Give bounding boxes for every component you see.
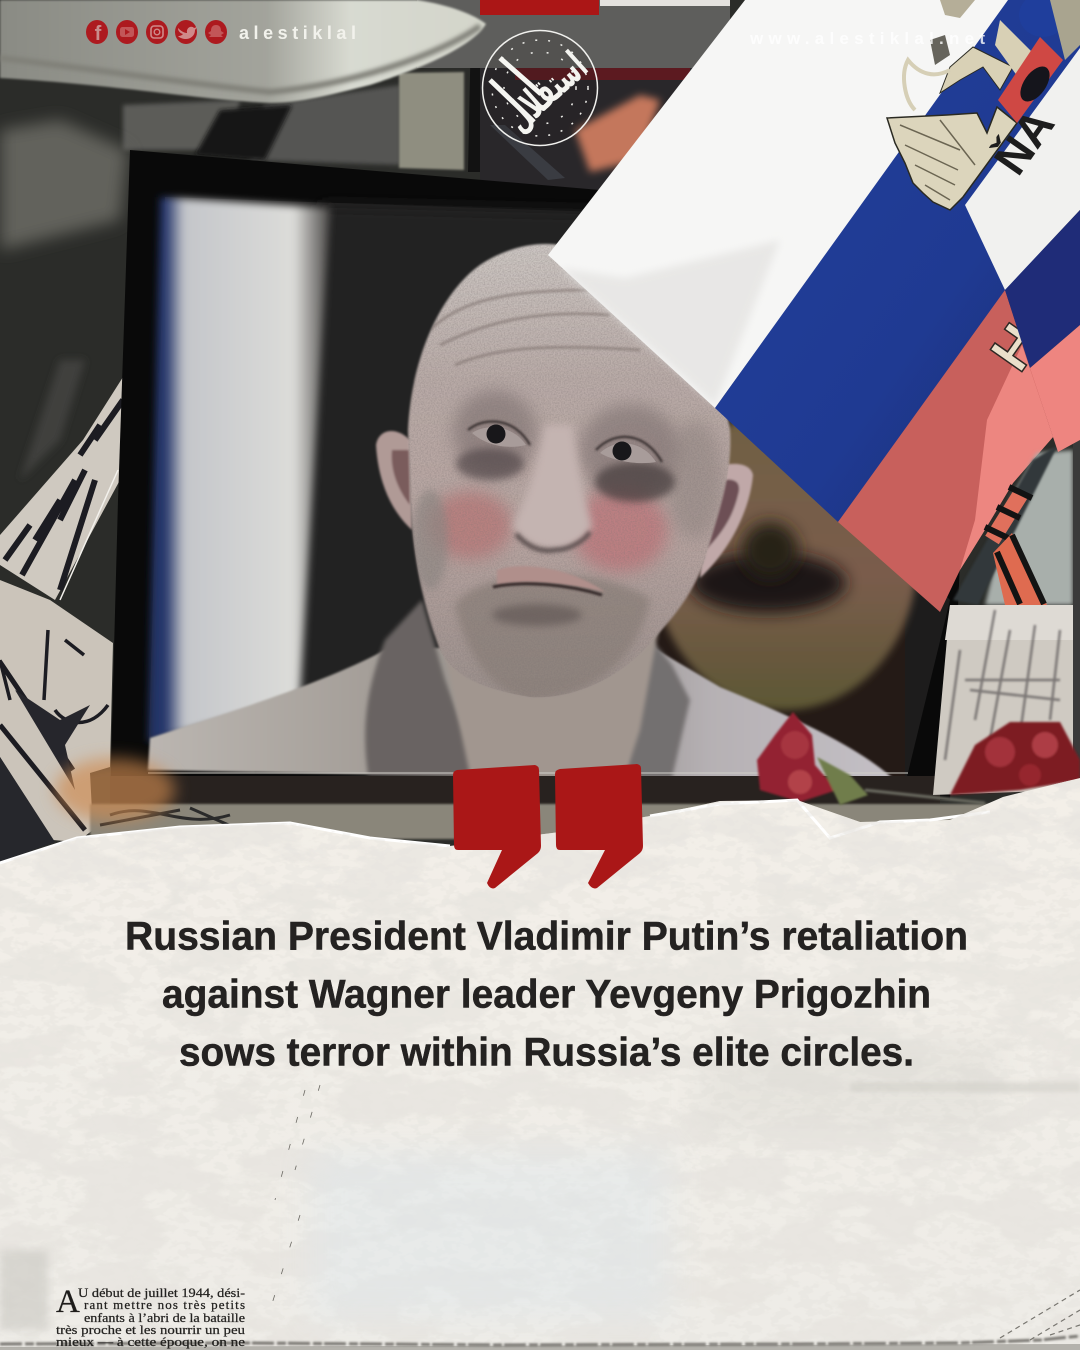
lower ribbon [993, 533, 1047, 605]
icon: twitter [175, 20, 197, 44]
French newspaper excerpt: très proche et les nourrir un peu [56, 1322, 246, 1337]
red quotation marks [453, 764, 643, 888]
blurred white curtain in the photo [148, 197, 330, 742]
icon: instagram [146, 20, 168, 44]
nose [513, 425, 592, 551]
social media icons [86, 20, 227, 45]
post, ribbon and grey wall at right [953, 440, 1080, 790]
bottom ragged edge [0, 1290, 1080, 1350]
light cloth at top left [0, 0, 486, 103]
brand name: alestiklal [239, 23, 356, 43]
French newspaper excerpt [56, 1284, 246, 1349]
French newspaper excerpt: rant mettre nos très petits [84, 1297, 245, 1312]
Russian flag, second small [965, 48, 1080, 452]
ears [376, 431, 753, 578]
letter on red stripe: H [978, 312, 1053, 382]
red tab at top [480, 0, 599, 15]
red stripe, shaded part [838, 290, 1053, 612]
icon: facebook [86, 20, 108, 45]
French newspaper excerpt: A [56, 1284, 80, 1320]
background: dark camouflage cloth [0, 0, 1080, 880]
torn paper panel [0, 778, 1080, 1350]
dark brown backdrop at right of photo [620, 420, 905, 785]
red carnation right [950, 722, 1080, 795]
quote text: Russian President Vladimir Putin’s retaliation [125, 914, 968, 958]
red carnation left [757, 712, 985, 805]
coat of arms eagle [887, 0, 1080, 210]
head [408, 244, 730, 697]
blurred round object behind the head [653, 410, 917, 710]
pencil drawing paper [933, 605, 1073, 795]
neck [440, 620, 660, 776]
website address: www.alestiklal.net [749, 29, 985, 48]
facial modelling [400, 240, 740, 710]
Russian flag, main [548, 0, 1080, 612]
frame lower ledge [55, 758, 990, 839]
shirt collars [365, 600, 690, 778]
eyes [456, 421, 675, 502]
faded newspaper texture on the paper [0, 780, 1080, 1350]
quote text: against Wagner leader Yevgeny Prigozhin [162, 972, 931, 1016]
icon: snapchat [205, 20, 227, 44]
French newspaper excerpt: enfants à l’abri de la bataille [84, 1310, 245, 1325]
circular calligraphy logo [482, 30, 598, 146]
quote text: sows terror within Russia’s elite circles. [179, 1030, 914, 1074]
circular calligraphy logo: استقلال [496, 43, 596, 140]
French newspaper excerpt: U début de juillet 1944, dési- [78, 1285, 245, 1300]
French newspaper excerpt: mieux — à cette époque, on ne [56, 1334, 245, 1349]
quote text [125, 914, 968, 1074]
graffiti cloth at left edge [0, 377, 123, 862]
icon: facebook: f [95, 23, 102, 45]
icon: youtube [116, 20, 138, 44]
mouth [492, 566, 605, 626]
handwriting on second flag: ŇA [984, 99, 1064, 184]
upper ribbon [992, 492, 1022, 540]
shirt [148, 640, 900, 785]
picture frame [110, 150, 960, 800]
red stripe, bright fold [960, 345, 1053, 570]
stone wall and dark strip behind the logo [417, 0, 730, 193]
framed photo of Prigozhin [148, 197, 950, 785]
